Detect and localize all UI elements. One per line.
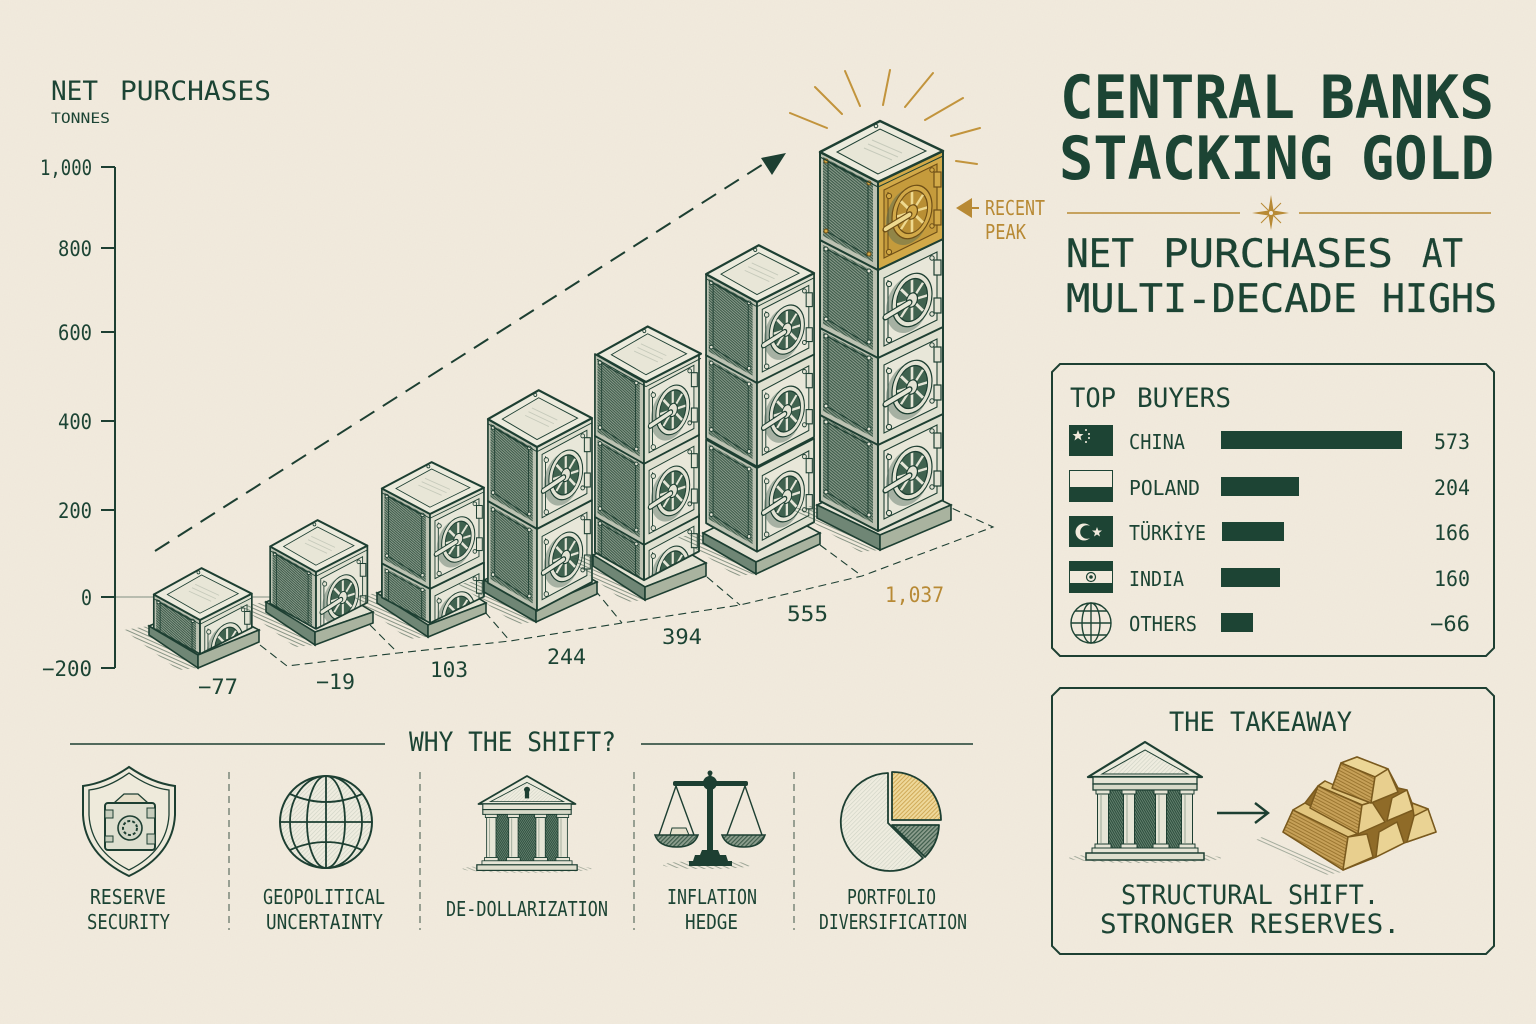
y axis with tick labels: 400 (58, 410, 92, 434)
arrow: bank to gold (1217, 803, 1268, 823)
chart heading: net purchases: PURCHASES (120, 76, 271, 107)
section heading: why the shift: WHY THE SHIFT? (409, 727, 616, 758)
icon: bank with keyhole (462, 776, 592, 873)
title (1059, 63, 1494, 194)
row: India: INDIA (1129, 567, 1184, 591)
callout: recent peak (956, 196, 1045, 244)
chart heading: net purchases (51, 76, 271, 127)
subtitle: NET (1066, 232, 1134, 277)
title: CENTRAL (1060, 63, 1295, 133)
row: Others: OTHERS (1129, 612, 1197, 636)
callout: recent peak: RECENT (985, 196, 1045, 220)
stack: -19 tonnes (240, 520, 373, 647)
y axis with tick labels: 1,000 (40, 156, 92, 180)
heading: the takeaway: THE TAKEAWAY (1169, 707, 1352, 738)
label: RESERVE (90, 885, 166, 909)
subtitle: HIGHS (1382, 277, 1497, 322)
y axis with tick labels: 0 (81, 586, 92, 610)
value labels under stacks: 244 (547, 645, 586, 669)
reason: geopolitical uncertainty (263, 776, 385, 934)
label: SECURITY (87, 910, 170, 934)
chart heading: net purchases: TONNES (51, 111, 110, 127)
value labels under stacks: 103 (430, 658, 468, 682)
label (263, 885, 385, 934)
row: India (1069, 561, 1470, 593)
icon: gold bars (1256, 757, 1436, 875)
takeaway text: STRONGER RESERVES. (1100, 909, 1400, 940)
title: STACKING (1059, 124, 1333, 194)
dashed dividers (229, 772, 794, 930)
label: DIVERSIFICATION (819, 910, 967, 934)
value labels under stacks: −19 (316, 670, 355, 694)
row: Poland: POLAND (1129, 476, 1200, 500)
label: INFLATION (667, 885, 757, 909)
stack: 103 tonnes (353, 461, 488, 638)
trend arrow (dashed) (155, 153, 786, 551)
heading: top buyers (1070, 383, 1231, 414)
row: Others (1071, 603, 1470, 643)
subtitle: MULTI-DECADE (1066, 277, 1357, 322)
takeaway text: STRUCTURAL SHIFT. (1121, 880, 1379, 911)
row: Others: −66 (1430, 612, 1470, 636)
subtitle: PURCHASES (1163, 232, 1393, 277)
label: UNCERTAINTY (266, 910, 383, 934)
row: China: CHINA (1129, 430, 1185, 454)
label (87, 885, 170, 934)
title: GOLD (1361, 124, 1494, 194)
chart heading: net purchases: NET (51, 76, 98, 107)
callout: recent peak: PEAK (985, 220, 1026, 244)
gold rays (790, 70, 980, 164)
value labels under stacks: 555 (787, 602, 828, 626)
icon: shield with safe (83, 767, 175, 876)
stack: 1,037 tonnes with gold safe (792, 121, 951, 552)
label (667, 885, 757, 934)
reason: portfolio diversification (819, 772, 967, 934)
row: Türkiye (1069, 516, 1470, 547)
row: Türkiye: 166 (1434, 521, 1470, 545)
icon: pie chart (841, 772, 941, 871)
title divider with star (1067, 195, 1491, 230)
gold safe (820, 151, 943, 270)
label: HEDGE (685, 910, 738, 934)
stack: 394 tonnes (568, 326, 706, 625)
y axis with tick labels (40, 156, 270, 681)
label: PORTFOLIO (847, 885, 936, 909)
subtitle (1066, 232, 1497, 322)
panel: the takeaway (1052, 688, 1494, 954)
reason: reserve security (83, 767, 175, 934)
label: DE-DOLLARIZATION (446, 897, 608, 921)
heading: top buyers: BUYERS (1137, 383, 1231, 414)
label (819, 885, 967, 934)
row: China: 573 (1434, 430, 1470, 454)
y axis with tick labels: 800 (58, 237, 92, 261)
value labels under stacks: −77 (198, 675, 238, 699)
label: GEOPOLITICAL (263, 885, 385, 909)
stack: 555 tonnes (678, 245, 820, 576)
stack: -77 tonnes (124, 567, 261, 670)
reason: de-dollarization (446, 776, 608, 921)
title: BANKS (1320, 63, 1494, 133)
stack: 244 tonnes (458, 390, 597, 624)
y axis with tick labels: −200 (42, 657, 92, 681)
subtitle: AT (1422, 232, 1463, 277)
value labels under stacks: 394 (662, 625, 702, 649)
icon: central bank (1069, 742, 1221, 863)
row: India: 160 (1434, 567, 1470, 591)
heading: top buyers: TOP (1070, 383, 1116, 414)
y axis with tick labels: 200 (58, 499, 92, 523)
row: China (1069, 425, 1470, 456)
reason: inflation hedge (655, 770, 765, 934)
row: Poland (1069, 470, 1470, 502)
dashed ground projection (260, 505, 993, 666)
icon: globe (280, 776, 372, 868)
value labels under stacks: 1,037 (885, 583, 944, 607)
value labels under stacks (198, 583, 944, 699)
row: Türkiye: TÜRKİYE (1129, 521, 1206, 545)
icon: balance scale (655, 770, 765, 869)
y axis with tick labels: 600 (58, 321, 92, 345)
takeaway text (1100, 880, 1400, 940)
panel: top buyers (1052, 364, 1494, 656)
row: Poland: 204 (1434, 476, 1470, 500)
